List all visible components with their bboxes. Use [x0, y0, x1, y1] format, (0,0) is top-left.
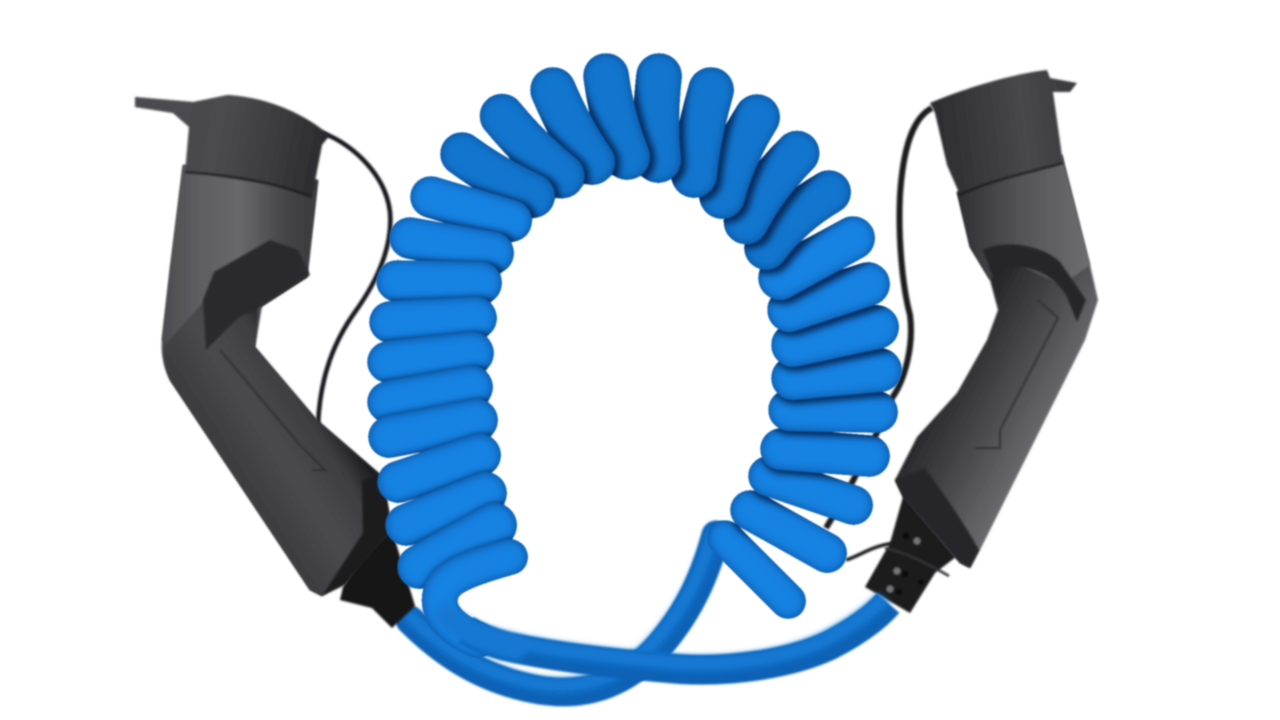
coil loops left side	[388, 197, 511, 640]
coil: blue spiral loops	[388, 76, 880, 640]
coil loops right side	[725, 238, 880, 601]
lower cable strand from left connector	[410, 535, 716, 692]
right grip trim line	[975, 300, 1058, 448]
thin wire: right connector tether	[826, 108, 932, 560]
left handle end band	[322, 477, 392, 596]
right cap	[930, 70, 1077, 195]
left dark recess	[203, 240, 310, 350]
left cap	[135, 95, 330, 197]
thin wire: left connector tether	[318, 133, 390, 425]
left strain relief	[340, 530, 415, 628]
left handle silhouette	[162, 165, 392, 596]
right handle rim	[895, 468, 979, 568]
left handle grip	[164, 300, 383, 596]
connector: left plug	[135, 95, 415, 628]
left grip trim line	[220, 350, 325, 470]
left handle collar	[162, 165, 318, 350]
right handle silhouette	[895, 155, 1098, 568]
right strain relief	[865, 480, 965, 613]
blend patch where coil tail joins strand	[446, 616, 515, 648]
upper cable strand to right connector	[446, 598, 888, 670]
right dark recess	[983, 244, 1086, 322]
right handle collar	[957, 155, 1090, 285]
coil loops crown	[462, 76, 829, 248]
connector: right plug	[865, 70, 1098, 613]
